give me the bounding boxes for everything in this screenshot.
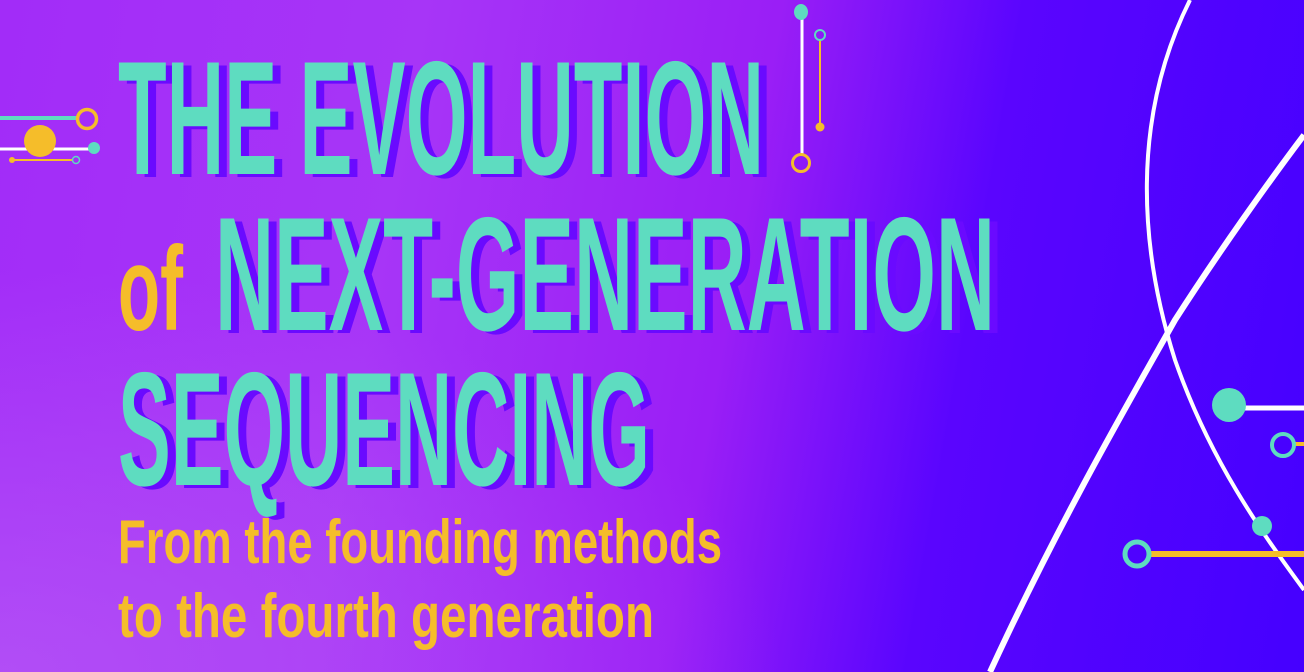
title: SEQUENCING — [118, 339, 650, 520]
subtitle: to the fourth generation — [118, 582, 654, 651]
subtitle — [118, 508, 722, 651]
decoration: right nodes — [1125, 388, 1304, 566]
decoration: top-left nodes — [0, 110, 100, 164]
subtitle: From the founding methods — [118, 508, 722, 577]
decoration: helix curves — [990, 0, 1304, 672]
title — [118, 28, 1003, 523]
title: SEQUENCING — [126, 342, 658, 523]
title: of — [118, 222, 184, 356]
decoration: top vertical nodes — [792, 4, 825, 172]
